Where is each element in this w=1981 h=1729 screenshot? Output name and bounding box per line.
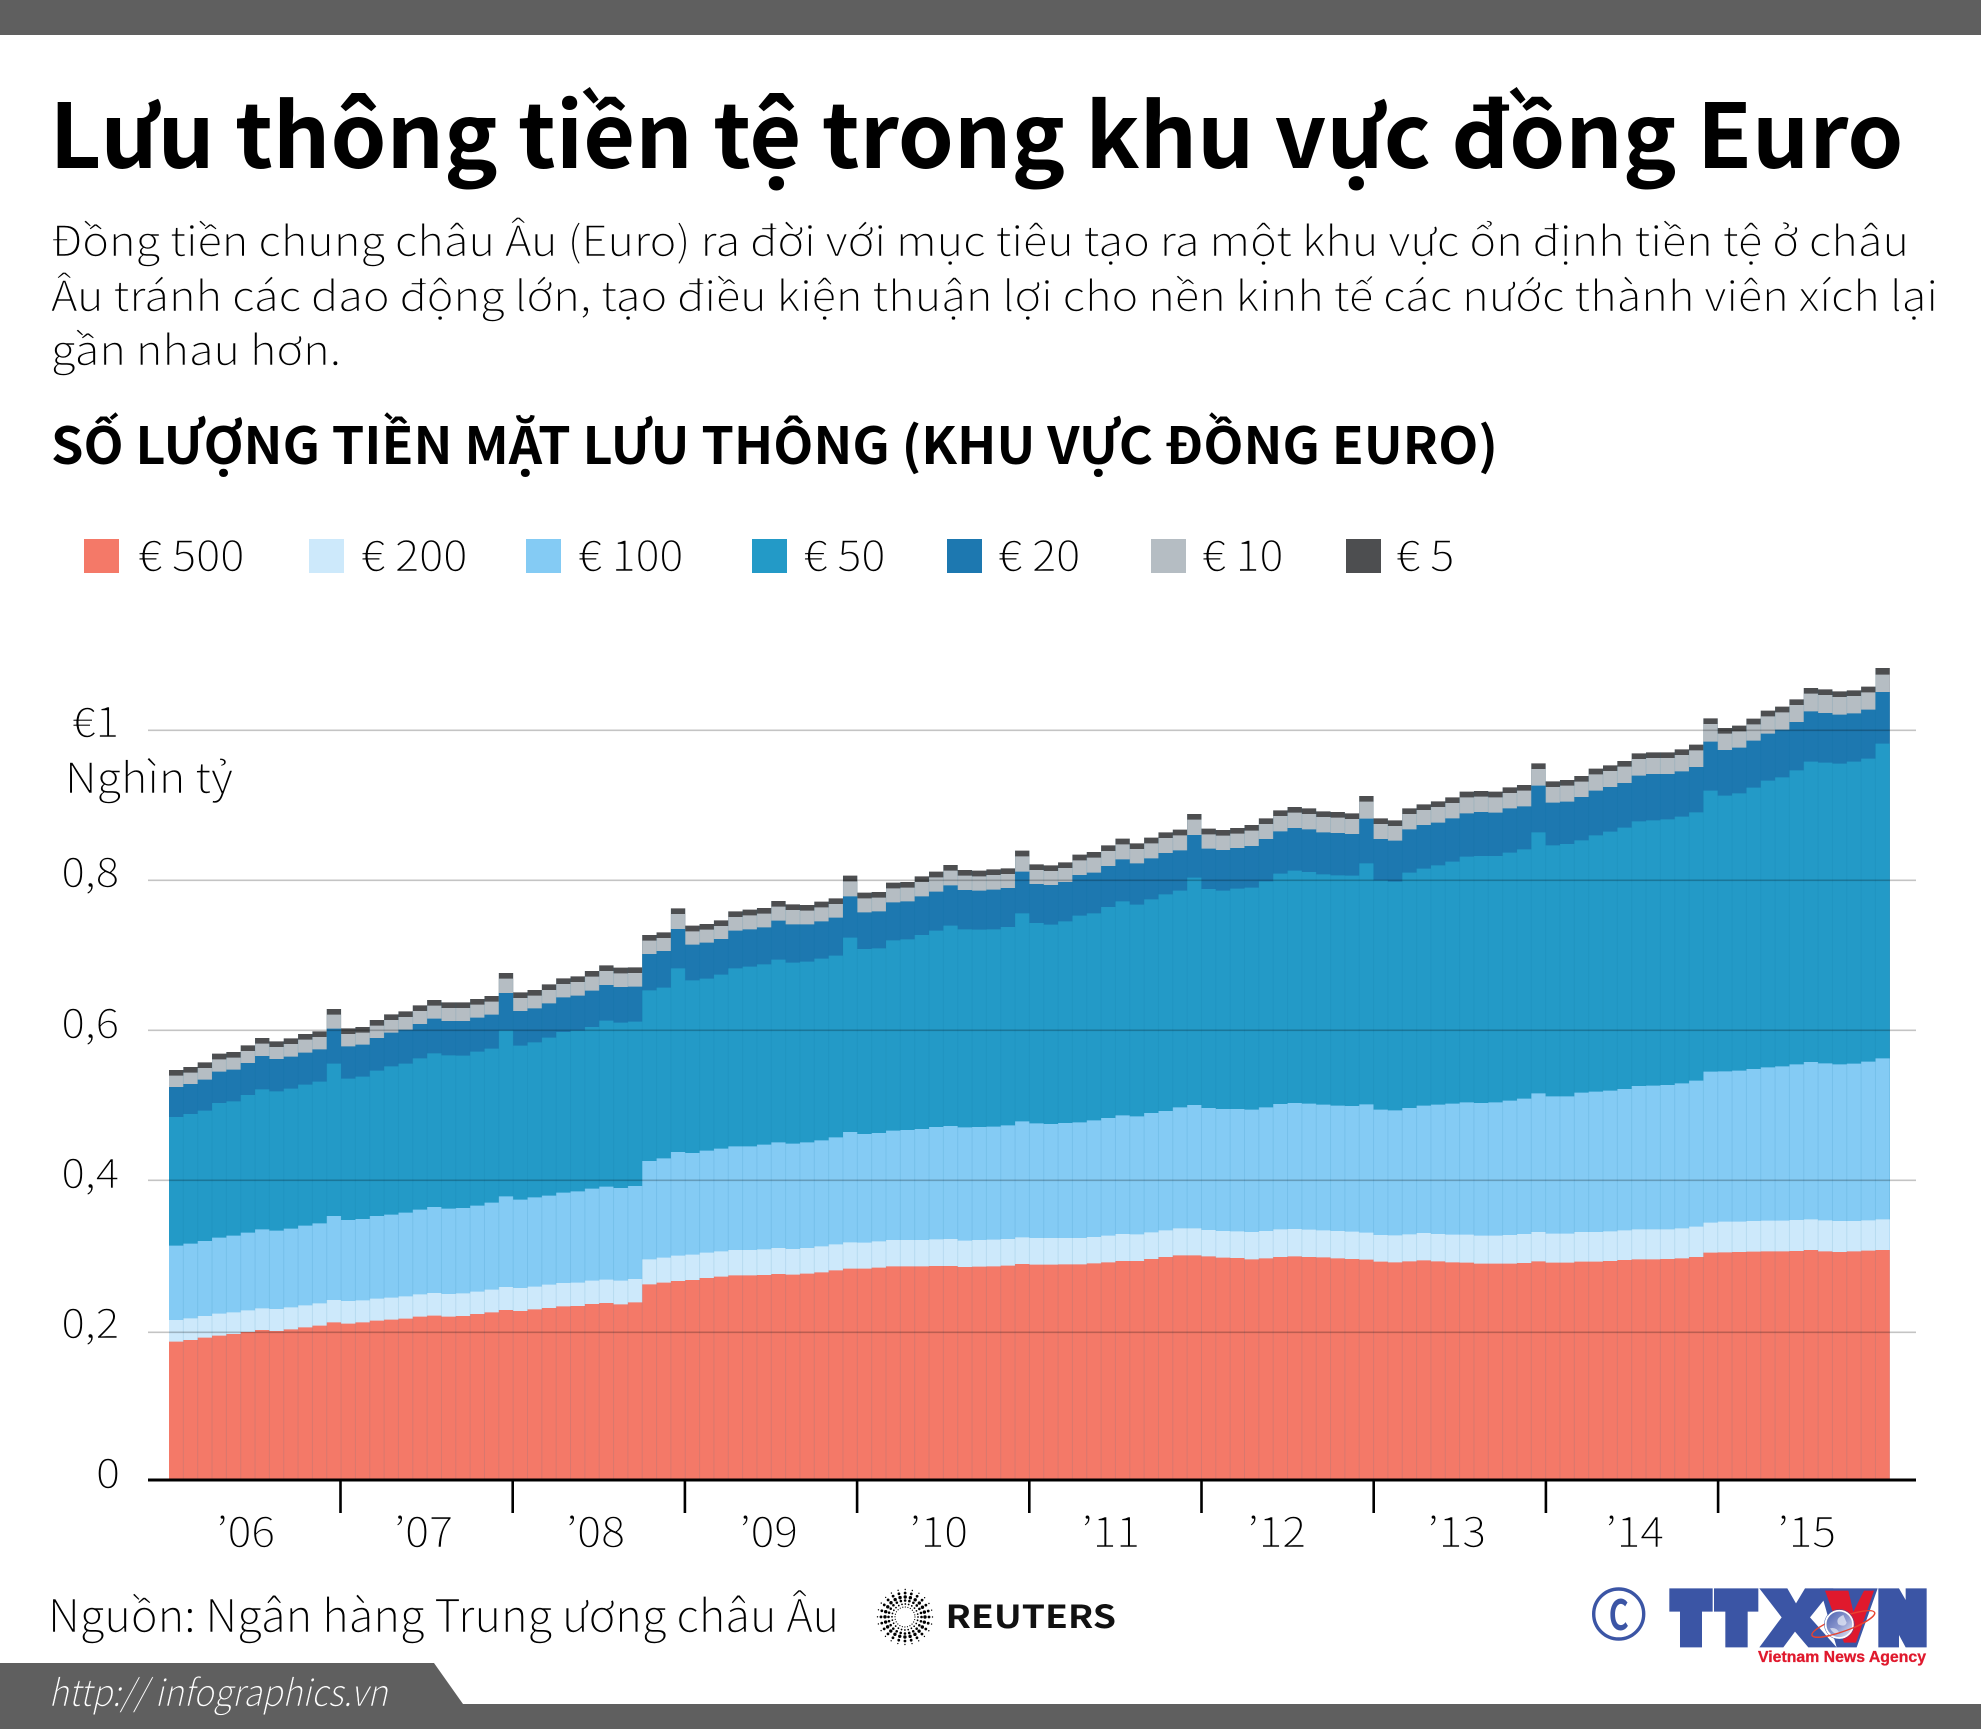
x axis year labels: ’08 (566, 1499, 625, 1559)
y axis labels (62, 689, 233, 1500)
y axis labels: 0,2 (62, 1290, 119, 1350)
series: 20 euro (169, 692, 1890, 1480)
y axis labels: 0,8 (62, 839, 119, 899)
globe with orbit (1809, 1606, 1877, 1642)
icon: Reuters dotted circle logo (878, 1590, 932, 1644)
x axis year labels: ’13 (1428, 1499, 1486, 1559)
legend item: 50 euro (752, 523, 885, 584)
y axis labels: Nghìn tỷ (65, 745, 233, 806)
intro paragraph: gần nhau hơn. (51, 317, 341, 377)
icon: copyright mark (1594, 1582, 1644, 1643)
intro paragraph: Âu tránh các dao động lớn, tạo điều kiện thuận lợi cho nền kinh tế các nước thành viên xích lại (51, 263, 1938, 323)
chart heading: SỐ LƯỢNG TIỀN MẶT LƯU THÔNG (KHU VỰC ĐỒNG EURO) (51, 405, 1498, 479)
legend item: 10 euro: € 10 (1202, 523, 1283, 584)
y axis labels: 0 (96, 1440, 120, 1500)
x axis year labels: ’11 (1082, 1499, 1140, 1559)
y axis labels: 0,4 (62, 1140, 119, 1200)
y axis labels: 0,6 (62, 990, 119, 1050)
legend item: 200 euro: € 200 (361, 523, 467, 584)
top banner bar (0, 0, 1981, 35)
series: 5 euro (169, 668, 1890, 1480)
x axis year labels: ’10 (910, 1499, 968, 1559)
intro paragraph (51, 208, 1938, 377)
stacked bar chart (148, 660, 1916, 1480)
icon: TTXVN logo: Vietnam News Agency (1758, 1649, 1926, 1666)
icon: TTXVN logo (1669, 1588, 1927, 1666)
legend item: 200 euro (309, 523, 467, 584)
x axis year labels: ’15 (1778, 1499, 1836, 1559)
Reuters wordmark: REUTERS (946, 1592, 1116, 1638)
legend item: 50 euro: € 50 (804, 523, 885, 584)
legend item: 10 euro (1151, 523, 1283, 584)
series layers (169, 668, 1890, 1480)
y axis labels: €1 (72, 689, 119, 749)
legend item: 100 euro (526, 523, 683, 584)
legend item: 500 euro: € 500 (138, 523, 244, 584)
x axis year labels (216, 1499, 1836, 1559)
legend item: 5 euro: € 5 (1396, 523, 1454, 584)
legend item: 5 euro (1346, 523, 1454, 584)
title: Lưu thông tiền tệ trong khu vực đồng Euro (50, 65, 1904, 194)
series: 500 euro (169, 1250, 1890, 1480)
series: 50 euro (169, 744, 1890, 1480)
legend (84, 523, 1454, 584)
x axis year labels: ’06 (216, 1499, 275, 1559)
series: 200 euro (169, 1219, 1890, 1480)
icon: copyright mark: C (1609, 1582, 1629, 1643)
series: 100 euro (169, 1058, 1890, 1480)
website url: http:// infographics.vn (48, 1663, 389, 1717)
x axis year labels: ’12 (1248, 1499, 1306, 1559)
letters TTXVN (1669, 1588, 1927, 1647)
x axis with year ticks (148, 1480, 1916, 1513)
source line: Nguồn: Ngân hàng Trung ương châu Âu (48, 1580, 839, 1645)
legend item: 20 euro: € 20 (998, 523, 1080, 584)
legend item: 100 euro: € 100 (578, 523, 683, 584)
red V (1825, 1591, 1874, 1643)
x axis year labels: ’09 (740, 1499, 798, 1559)
x axis year labels: ’07 (394, 1499, 453, 1559)
legend item: 20 euro (947, 523, 1080, 584)
intro paragraph: Đồng tiền chung châu Âu (Euro) ra đời với mục tiêu tạo ra một khu vực ổn định tiền tệ ở châu (51, 208, 1909, 268)
legend item: 500 euro (84, 523, 244, 584)
x axis year labels: ’14 (1606, 1499, 1664, 1559)
footer bar with website tab (0, 1663, 1981, 1729)
series: 10 euro (169, 675, 1890, 1480)
